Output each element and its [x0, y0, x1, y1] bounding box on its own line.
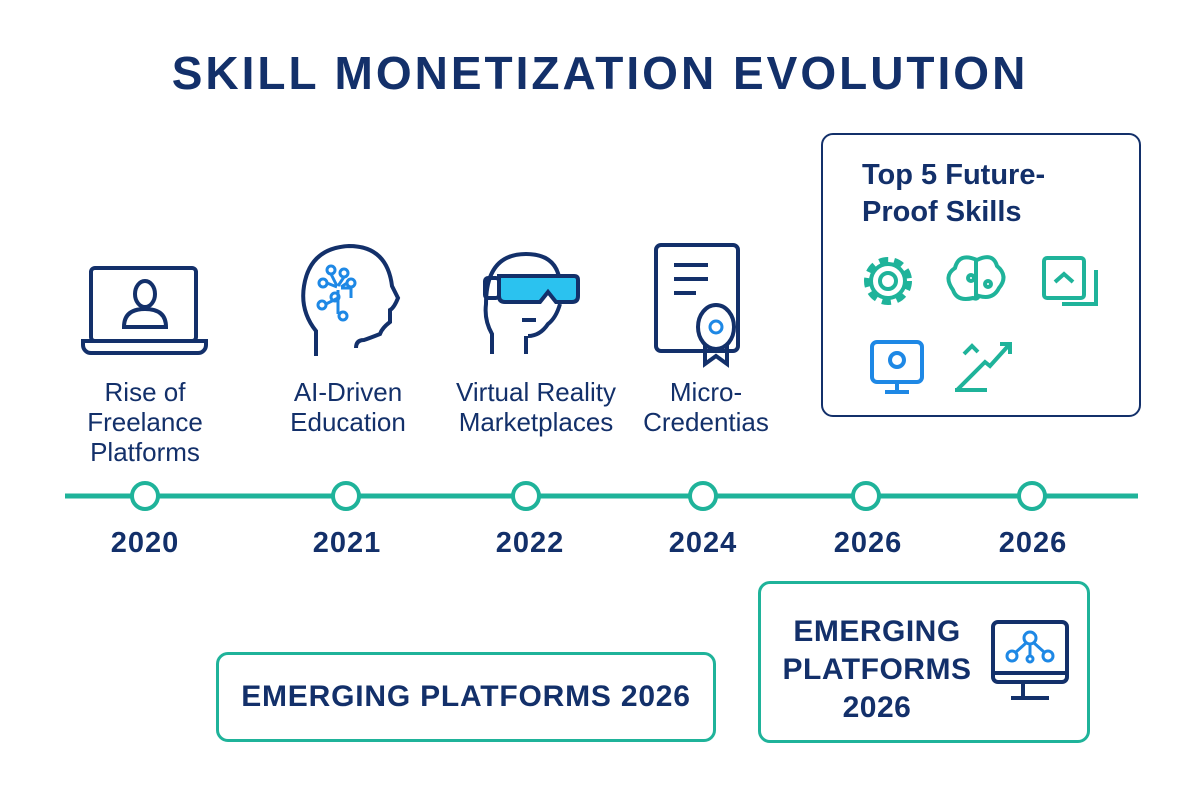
- label: freelance: [87, 377, 203, 467]
- label: micro-credentials: [643, 377, 769, 437]
- callout text: [783, 615, 971, 724]
- title: SKILL MONETIZATION EVOLUTION: [172, 47, 1028, 99]
- label: AI education: AI-Driven: [294, 377, 402, 407]
- label: freelance: Platforms: [90, 437, 200, 467]
- icon: VR headset: [483, 252, 580, 354]
- label: VR marketplaces: Virtual Reality: [456, 377, 616, 407]
- label: AI education: Education: [290, 407, 406, 437]
- year labels: 2020: [111, 527, 179, 559]
- callout text: 2026: [843, 691, 911, 724]
- callout: emerging platforms right: [758, 581, 1090, 743]
- callout text: EMERGING: [793, 615, 961, 648]
- label: freelance: Rise of: [105, 377, 185, 407]
- label: micro-credentials: Micro-: [670, 377, 742, 407]
- callout: emerging platforms left: [216, 652, 716, 742]
- icon: monitor network: [991, 620, 1069, 700]
- label: AI education: [290, 377, 406, 437]
- icon: laptop: [81, 266, 208, 355]
- skills heading: Proof Skills: [862, 196, 1022, 228]
- label: VR marketplaces: Marketplaces: [459, 407, 613, 437]
- label: VR marketplaces: [456, 377, 616, 437]
- year labels: 2024: [669, 527, 737, 559]
- label: micro-credentials: Credentias: [643, 407, 769, 437]
- icon: certificate: [654, 243, 740, 368]
- skill icons: [864, 255, 1098, 394]
- year labels: [111, 527, 1067, 559]
- icon: AI head: [301, 244, 400, 356]
- callout text: PLATFORMS: [783, 653, 971, 686]
- year labels: 2021: [313, 527, 381, 559]
- timeline: [65, 481, 1138, 511]
- year labels: 2022: [496, 527, 564, 559]
- label: freelance: Freelance: [87, 407, 203, 437]
- year labels: 2026: [834, 527, 902, 559]
- panel: top 5 skills: [821, 133, 1141, 417]
- callout: emerging platforms left: EMERGING PLATFORMS 2026: [241, 680, 691, 713]
- year labels: 2026: [999, 527, 1067, 559]
- skills heading: [862, 159, 1045, 228]
- skills heading: Top 5 Future-: [862, 159, 1045, 191]
